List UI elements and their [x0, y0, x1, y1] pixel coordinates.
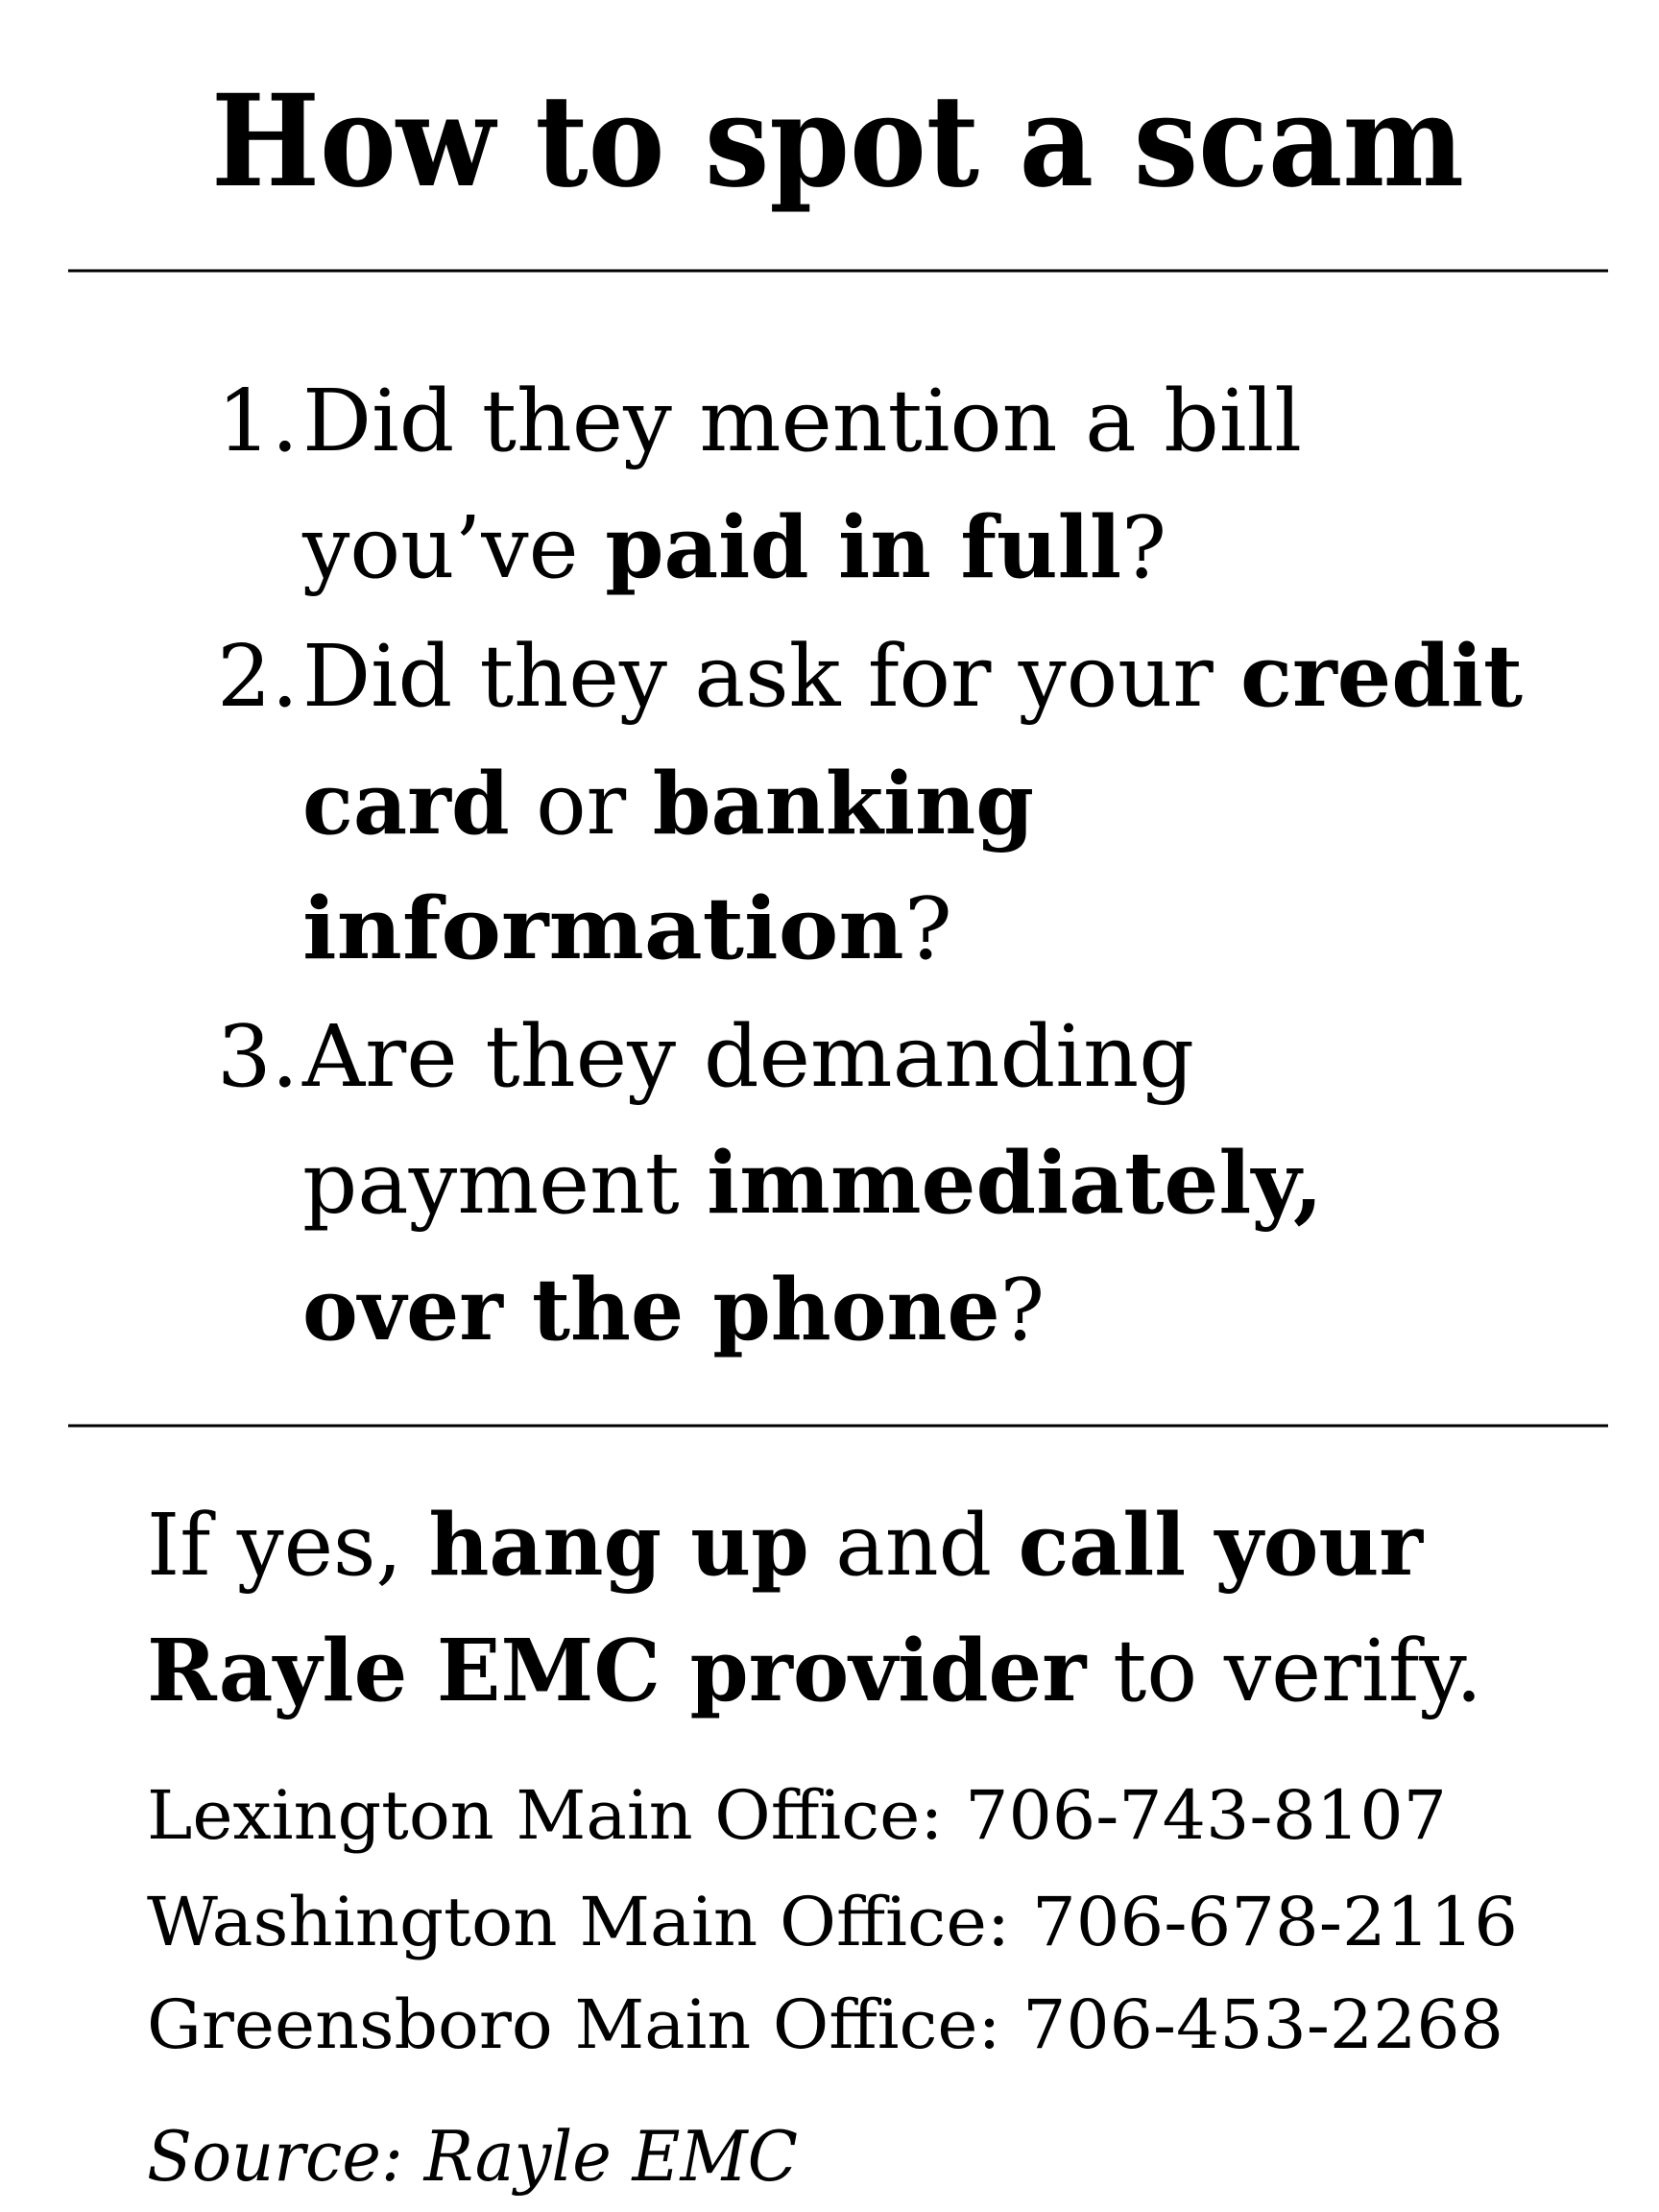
- text block: office phone numbers: Washington Main Office: 706-678-2116: [147, 1883, 1518, 1961]
- item 1: you’ve paid in full?: [301, 496, 1166, 597]
- list: scam warning questions: [217, 371, 1523, 1359]
- item 2: Did they ask for your credit: [302, 625, 1523, 726]
- item 2: [217, 625, 1523, 978]
- item 3: payment immediately,: [302, 1132, 1323, 1233]
- item 2: card or banking: [302, 753, 1034, 854]
- item 1: Did they mention a bill: [302, 371, 1302, 470]
- item 2: information ?: [302, 878, 952, 978]
- callout: hang up advice: If yes, hang up and call your: [147, 1494, 1424, 1595]
- item 2: 2.: [217, 626, 299, 726]
- item 3: 3.: [217, 1006, 299, 1106]
- item 3: Are they demanding: [301, 1006, 1194, 1106]
- item 1: [217, 371, 1302, 597]
- callout: hang up advice: Rayle EMC provider to verify.: [147, 1620, 1482, 1720]
- title: How to spot a scam: [211, 67, 1464, 216]
- item 3: over the phone?: [302, 1259, 1045, 1359]
- item 3: [217, 1006, 1323, 1359]
- source: Source: Rayle EMC: [147, 2116, 798, 2197]
- callout: hang up advice: [147, 1494, 1482, 1720]
- item 1: 1.: [217, 371, 299, 470]
- text block: office phone numbers: Greensboro Main Office: 706-453-2268: [147, 1985, 1503, 2064]
- text block: office phone numbers: Lexington Main Office: 706-743-8107: [147, 1776, 1447, 1855]
- text block: office phone numbers: [147, 1776, 1518, 2064]
